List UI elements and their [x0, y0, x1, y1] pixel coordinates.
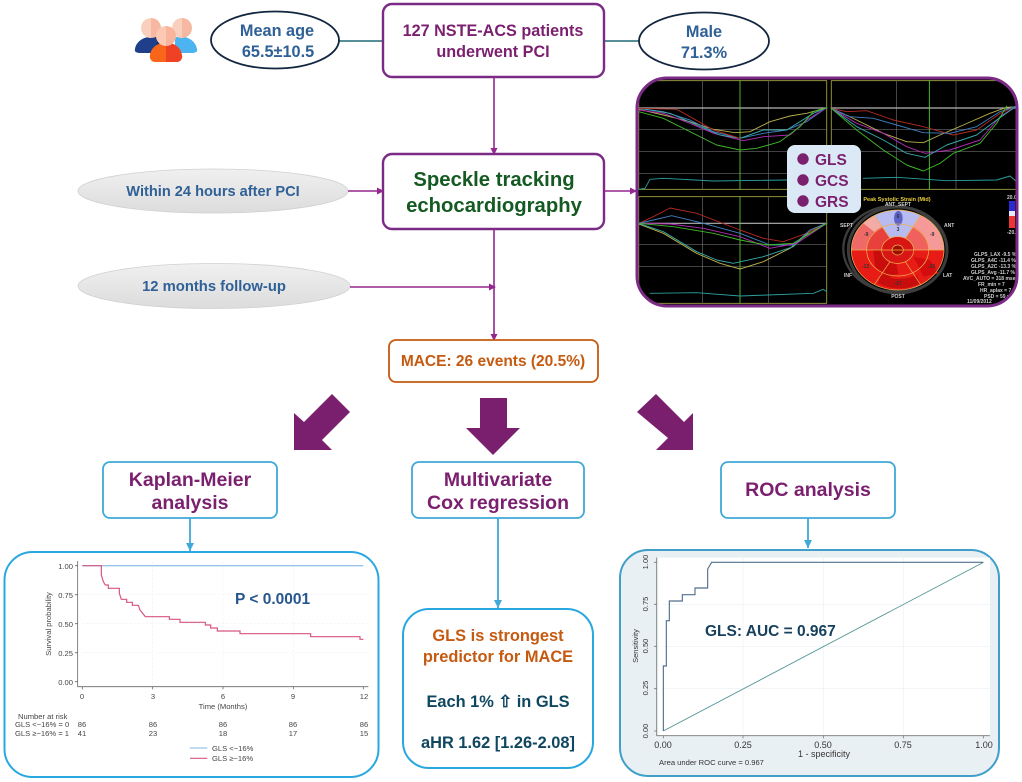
axis labels and risk table: GLS <−16% [212, 744, 254, 753]
ROC axis labels: 0.00 [654, 740, 672, 750]
axis labels and risk table [15, 562, 368, 763]
connector: patients to male [604, 40, 640, 42]
heading: multivariate Cox regression: Multivariate [444, 469, 552, 491]
ROC axis labels: Sensitivity [631, 629, 640, 663]
box: speckle tracking echocardiography: echocardiography [406, 195, 583, 217]
axis labels and risk table: GLS ≥−16% [212, 754, 253, 763]
heading: Kaplan-Meier analysis [103, 462, 277, 518]
axis labels and risk table: 23 [149, 729, 157, 738]
arrow: Cox to result [497, 518, 499, 608]
bullseye labels: PSD = 59 ms [984, 294, 1014, 300]
bullseye labels: SEPT [840, 223, 853, 229]
bullseye plot [843, 206, 947, 293]
box: patients: underwent PCI [436, 43, 550, 61]
arrow: speckle tracking to MACE [493, 229, 495, 340]
box: MACE events [389, 340, 598, 382]
panel: Cox regression result: Each 1% ⇧ in GLS [426, 693, 570, 711]
axis labels and risk table: 1.00 [58, 562, 73, 571]
axis labels and risk table: 6 [221, 692, 225, 701]
bullseye labels: 11/09/2012 [967, 299, 992, 305]
bullseye labels: -13 [862, 264, 869, 270]
panel: strain image [637, 78, 1019, 306]
label: 12 months follow-up: 12 months follow-up [142, 279, 286, 295]
legend: strain measures: GCS [815, 173, 849, 190]
ROC axis labels: 0.00 [641, 724, 650, 738]
axis labels and risk table: Number at risk [18, 712, 68, 721]
axis labels and risk table: 0 [80, 692, 84, 701]
panel: Cox regression result: aHR 1.62 [1.26-2.08] [421, 734, 575, 752]
box: speckle tracking echocardiography: Speckle tracking [413, 169, 575, 191]
ROC axis labels: 1.00 [975, 740, 993, 750]
axis labels and risk table: 86 [360, 720, 368, 729]
ROC axis labels: 0.75 [641, 597, 650, 611]
axis labels and risk table: 15 [360, 729, 368, 738]
axis labels and risk table: Survival probability [44, 592, 53, 656]
ROC axis labels [631, 555, 993, 767]
panel: Cox regression result: GLS is strongest [432, 627, 564, 645]
axis labels and risk table: 86 [78, 720, 86, 729]
arrow: speckle tracking to strain image [604, 190, 636, 192]
p value: P < 0.0001 [235, 591, 311, 608]
box: patients [383, 4, 604, 77]
axis labels and risk table: 0.25 [58, 649, 73, 658]
panel: ROC chart [620, 550, 999, 776]
panel: Kaplan-Meier chart [4, 552, 378, 777]
bullseye labels: GLPS_Avg -11.7 % [971, 270, 1016, 276]
bullseye labels: -9 [864, 232, 869, 238]
ROC axis labels: 0.25 [641, 681, 650, 695]
bullseye labels: ANT [944, 223, 954, 229]
bullseye labels: GLPS_A4C -11.4 % [971, 258, 1016, 264]
survival curves and axes [75, 561, 368, 758]
heading: multivariate Cox regression: Cox regression [427, 492, 569, 514]
bullseye labels: FR_min = 7 [978, 282, 1005, 288]
callout: mean age: 65.5±10.5 [242, 43, 314, 61]
arrow: timing to speckle tracking [348, 190, 383, 192]
arrow: patients to speckle tracking [493, 77, 495, 154]
arrow: MACE to Cox regression [466, 398, 520, 455]
ROC axis labels: 0.50 [814, 740, 832, 750]
connector: age to patients [339, 40, 383, 42]
axis labels and risk table: 0.75 [58, 591, 73, 600]
axis labels and risk table: GLS <−16% = 0 [15, 720, 69, 729]
bullseye labels: 20.0 [1007, 195, 1017, 201]
arrow: follow-up to main line [350, 286, 495, 288]
ROC curve and axes [654, 558, 990, 738]
box: patients: 127 NSTE-ACS patients [403, 22, 583, 40]
callout: male: 71.3% [681, 44, 728, 62]
bullseye labels: -20.0 [1007, 230, 1019, 236]
label: within 24 hours after PCI: Within 24 hours after PCI [126, 184, 300, 200]
axis labels and risk table: 0.50 [58, 620, 73, 629]
ROC axis labels: Area under ROC curve = 0.967 [659, 758, 764, 767]
panel: Cox regression result: predictor for MACE [423, 648, 573, 666]
panel: Cox regression result [403, 609, 593, 768]
axis labels and risk table: GLS ≥−16% = 1 [15, 729, 69, 738]
bullseye labels: 6 [897, 214, 900, 220]
axis labels and risk table: 18 [219, 729, 227, 738]
axis labels and risk table: 17 [289, 729, 297, 738]
axis labels and risk table: Time (Months) [199, 702, 248, 711]
AUC value: GLS: AUC = 0.967 [705, 623, 836, 640]
ROC axis labels: 1 - specificity [798, 749, 851, 759]
ROC axis labels: 0.25 [734, 740, 752, 750]
callout: mean age [211, 12, 339, 68]
heading: ROC analysis [721, 462, 895, 518]
callout: mean age: Mean age [240, 22, 314, 40]
ROC axis labels: 0.50 [641, 639, 650, 653]
bullseye labels: GLPS_A2C -13.3 % [971, 264, 1017, 270]
bullseye labels: -9 [930, 232, 935, 238]
axis labels and risk table: 0.00 [58, 678, 73, 687]
axis labels and risk table: 41 [78, 729, 86, 738]
axis labels and risk table: 86 [219, 720, 227, 729]
axis labels and risk table: 86 [149, 720, 157, 729]
legend: strain measures: GLS [815, 152, 847, 169]
axis labels and risk table: 86 [289, 720, 297, 729]
bullseye labels: 3 [897, 227, 900, 233]
bullseye labels [840, 195, 1019, 305]
box: speckle tracking echocardiography [383, 154, 604, 229]
legend: strain measures: GRS [815, 194, 849, 211]
bullseye labels: -17 [894, 281, 902, 287]
arrow: Kaplan-Meier to chart [189, 518, 191, 551]
bullseye labels: LAT [943, 273, 952, 279]
arrow: ROC to chart [807, 518, 809, 548]
heading: Kaplan-Meier analysis: Kaplan-Meier [129, 469, 252, 491]
arrow: MACE to Kaplan-Meier [294, 394, 350, 450]
box: MACE events: MACE: 26 events (20.5%) [401, 353, 585, 370]
heading: Kaplan-Meier analysis: analysis [152, 492, 229, 514]
heading: multivariate Cox regression [412, 462, 584, 518]
callout: male [639, 12, 769, 70]
icon: group of patients [135, 18, 197, 62]
strain curves [639, 81, 1017, 303]
axis labels and risk table: 12 [360, 692, 368, 701]
bullseye labels: Peak Systolic Strain (Mid) [863, 197, 931, 203]
bullseye labels: ANT_SEPT [885, 202, 911, 208]
bullseye labels: INF [844, 273, 852, 279]
bullseye labels: POST [891, 294, 905, 300]
axis labels and risk table: 3 [151, 692, 155, 701]
legend: strain measures [787, 145, 861, 213]
label: within 24 hours after PCI [78, 169, 348, 213]
heading: ROC analysis: ROC analysis [745, 479, 871, 501]
axis labels and risk table: 9 [291, 692, 295, 701]
ROC axis labels: 0.75 [894, 740, 912, 750]
callout: male: Male [686, 23, 722, 41]
arrow: MACE to ROC [637, 394, 693, 450]
strain colour scale [1009, 216, 1015, 228]
bullseye labels: AVC_AUTO = 318 msec [963, 276, 1018, 282]
bullseye labels: -15 [928, 264, 935, 270]
label: 12 months follow-up [78, 264, 350, 308]
bullseye labels: GLPS_LAX -9.5 % [974, 252, 1017, 258]
ROC axis labels: 1.00 [641, 555, 650, 569]
bullseye labels: HR_aplax = 7 [980, 288, 1011, 294]
